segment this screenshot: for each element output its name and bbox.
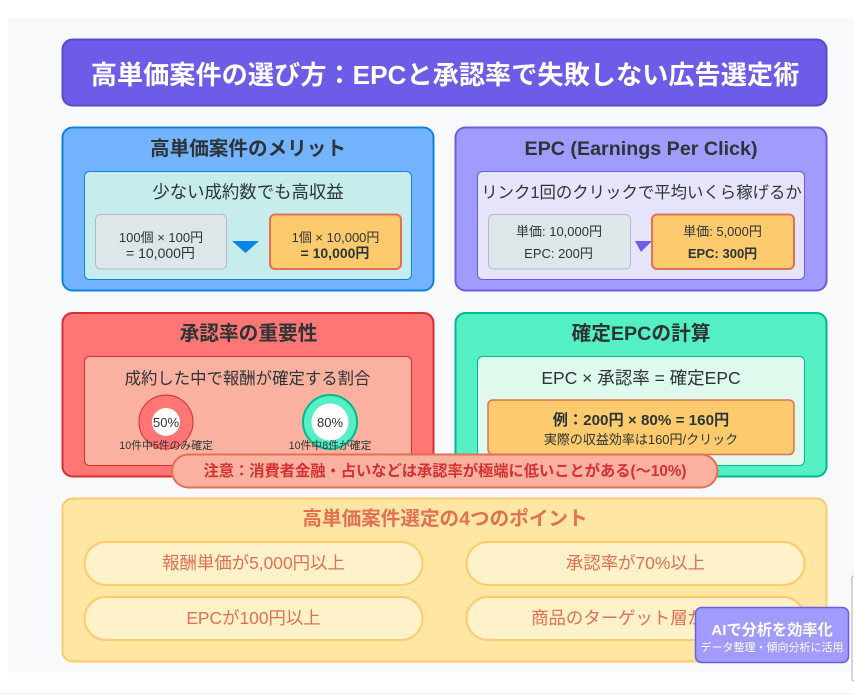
panel: merits of high-priced offers [62, 128, 434, 290]
donut: 80% [289, 395, 372, 452]
comparison box: low price [96, 214, 226, 269]
badge: AI analysis: AIで分析を効率化 [711, 621, 833, 639]
heading: approval rate: 承認率の重要性 [180, 323, 317, 345]
point: approval rate [466, 542, 804, 585]
callout: caution: 注意：消費者金融・占いなどは承認率が極端に低いことがある(～10%) [204, 462, 686, 480]
inner card: merits: 少ない成約数でも高収益 [152, 182, 344, 202]
inner card: approval rate: 成約した中で報酬が確定する割合 [125, 370, 370, 388]
comparison box: high EPC: EPC: 300円 [688, 246, 757, 261]
panel: approval rate [62, 313, 434, 476]
inner card: approval rate [84, 356, 412, 466]
inner card: EPC [478, 172, 804, 280]
point: reward price: 報酬単価が5,000円以上 [162, 553, 345, 573]
inner card: EPC: リンク1回のクリックで平均いくら稼げるか [481, 184, 802, 202]
comparison box: high price: 1個 × 10,000円 [292, 230, 379, 245]
donut: 50% [119, 395, 213, 452]
donut: 50%: 50% [153, 415, 179, 430]
point: reward price [84, 542, 422, 585]
comparison box: low EPC: 単価: 10,000円 [516, 224, 602, 239]
badge: AI analysis: データ整理・傾向分析に活用 [700, 640, 844, 654]
badge: AI analysis [696, 608, 848, 662]
comparison box: high price [270, 214, 401, 269]
arrow: merits [232, 241, 259, 253]
heading: EPC: EPC (Earnings Per Click) [524, 138, 758, 160]
example box: 実際の収益効率は160円/クリック [544, 432, 738, 447]
heading: merits: 高単価案件のメリット [150, 137, 346, 160]
title [62, 40, 826, 106]
donut: 80%: 80% [317, 415, 343, 430]
comparison box: low price: 100個 × 100円 [119, 230, 203, 245]
heading: four points: 高単価案件選定の4つのポイント [302, 507, 588, 530]
heading: confirmed EPC: 確定EPCの計算 [572, 322, 710, 345]
donut: 80%: 10件中8件が確定 [289, 438, 372, 452]
panel: EPC [456, 128, 826, 290]
comparison box: high EPC: 単価: 5,000円 [683, 224, 762, 239]
comparison box: high price: = 10,000円 [301, 245, 369, 261]
comparison box: low EPC [488, 214, 630, 269]
callout: caution [172, 454, 718, 488]
point: target audience [466, 597, 804, 640]
inner card: merits [84, 172, 412, 280]
inner card: confirmed EPC [478, 356, 804, 466]
example box [488, 400, 794, 454]
panel: four points [62, 498, 826, 662]
comparison box: low EPC: EPC: 200円 [524, 246, 593, 261]
comparison box: low price: = 10,000円 [126, 245, 195, 261]
point: target audience: 商品のターゲット層が明確 [531, 608, 740, 628]
point: approval rate: 承認率が70%以上 [566, 553, 705, 573]
point: EPC: EPCが100円以上 [186, 608, 321, 628]
panel: confirmed EPC [456, 313, 826, 476]
arrow: EPC [635, 241, 652, 252]
comparison box: high EPC [652, 214, 794, 269]
donut: 50%: 10件中5件のみ確定 [119, 439, 213, 452]
title: 高単価案件の選び方：EPCと承認率で失敗しない広告選定術 [91, 60, 799, 90]
point: EPC [84, 597, 422, 640]
inner card: confirmed EPC: EPC × 承認率 = 確定EPC [541, 368, 741, 388]
example box: 例：200円 × 80% = 160円 [553, 412, 729, 429]
